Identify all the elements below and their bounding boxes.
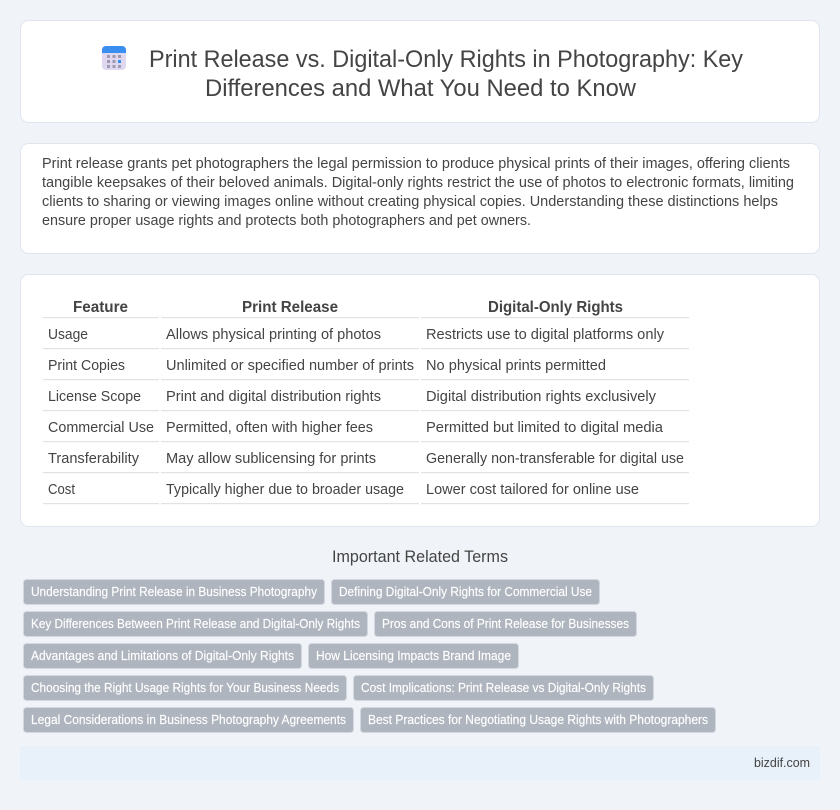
- table header: Digital-Only Rights: [488, 299, 623, 316]
- tag: [24, 580, 324, 604]
- row: transferability: Transferability: [48, 451, 140, 467]
- row: print copies: [48, 358, 606, 374]
- row: usage: Allows physical printing of photos: [166, 327, 381, 343]
- tag: Cost Implications: Print Release vs Digital-Only Rights: [361, 681, 646, 695]
- row: cost: Lower cost tailored for online use: [426, 482, 639, 498]
- footer bar: [20, 746, 820, 780]
- tag: Legal Considerations in Business Photography Agreements: [31, 713, 346, 727]
- panel: intro paragraph: [20, 144, 820, 254]
- tag: [354, 676, 654, 700]
- row: commercial use: Permitted, often with higher fees: [166, 420, 373, 436]
- row: cost: [48, 482, 639, 498]
- row: print copies: No physical prints permitted: [426, 358, 606, 374]
- table header: Print Release: [242, 299, 338, 316]
- tag: How Licensing Impacts Brand Image: [316, 649, 511, 663]
- table header: Feature: [73, 299, 128, 316]
- text block: intro: Print release grants pet photographers the legal permission to produce physical prints of their images, offering clients: [42, 156, 790, 172]
- related term tags: [24, 580, 716, 732]
- tag: [24, 708, 354, 732]
- row: commercial use: [48, 420, 664, 436]
- tag: Advantages and Limitations of Digital-Only Rights: [31, 649, 294, 663]
- tag: [24, 676, 346, 700]
- row: usage: Usage: [48, 327, 88, 343]
- row: transferability: [48, 451, 684, 467]
- tag: Pros and Cons of Print Release for Businesses: [382, 617, 629, 631]
- tag: [374, 612, 636, 636]
- heading: related terms: Important Related Terms: [332, 548, 508, 566]
- row: license scope: Digital distribution rights exclusively: [426, 389, 657, 405]
- text block: intro: clients to sharing or viewing images online without creating physical copies. Understanding these distinctions helps: [42, 194, 778, 210]
- tag: Best Practices for Negotiating Usage Rights with Photographers: [368, 713, 708, 727]
- row: transferability: Generally non-transferable for digital use: [426, 451, 684, 467]
- tag: Key Differences Between Print Release and Digital-Only Rights: [31, 617, 360, 631]
- title: Differences and What You Need to Know: [205, 75, 636, 102]
- row: license scope: [48, 389, 657, 405]
- row: license scope: License Scope: [48, 389, 141, 405]
- tag: Understanding Print Release in Business Photography: [31, 585, 318, 599]
- row: usage: Restricts use to digital platforms only: [426, 327, 665, 343]
- tag: Choosing the Right Usage Rights for Your Business Needs: [31, 681, 339, 695]
- row: cost: Cost: [48, 482, 75, 498]
- panel: title header: [20, 20, 820, 122]
- title: [149, 46, 744, 102]
- row: commercial use: Commercial Use: [48, 420, 154, 436]
- text block: intro: tangible keepsakes of their beloved animals. Digital-only rights restrict the use of photos to electronic formats, limiting: [42, 175, 794, 191]
- panel: comparison table: [20, 274, 820, 526]
- text block: intro: ensure proper usage rights and protects both photographers and pet owners.: [42, 213, 531, 229]
- row: transferability: May allow sublicensing for prints: [166, 451, 376, 467]
- row: print copies: Print Copies: [48, 358, 125, 374]
- row: license scope: Print and digital distribution rights: [166, 389, 381, 405]
- tag: Defining Digital-Only Rights for Commercial Use: [339, 585, 592, 599]
- row: cost: Typically higher due to broader usage: [166, 482, 404, 498]
- row: usage: [48, 327, 665, 343]
- tag: [24, 612, 368, 636]
- tag: [332, 580, 600, 604]
- row: print copies: Unlimited or specified number of prints: [166, 358, 414, 374]
- row: commercial use: Permitted but limited to digital media: [426, 420, 664, 436]
- title: Print Release vs. Digital-Only Rights in Photography: Key: [149, 46, 744, 73]
- tag: [24, 644, 302, 668]
- tag: [308, 644, 518, 668]
- icon: calendar: [102, 46, 126, 70]
- table header: [73, 299, 623, 316]
- tag: [360, 708, 716, 732]
- text block: intro: [42, 156, 794, 229]
- footer text: bizdif.com: [754, 755, 810, 770]
